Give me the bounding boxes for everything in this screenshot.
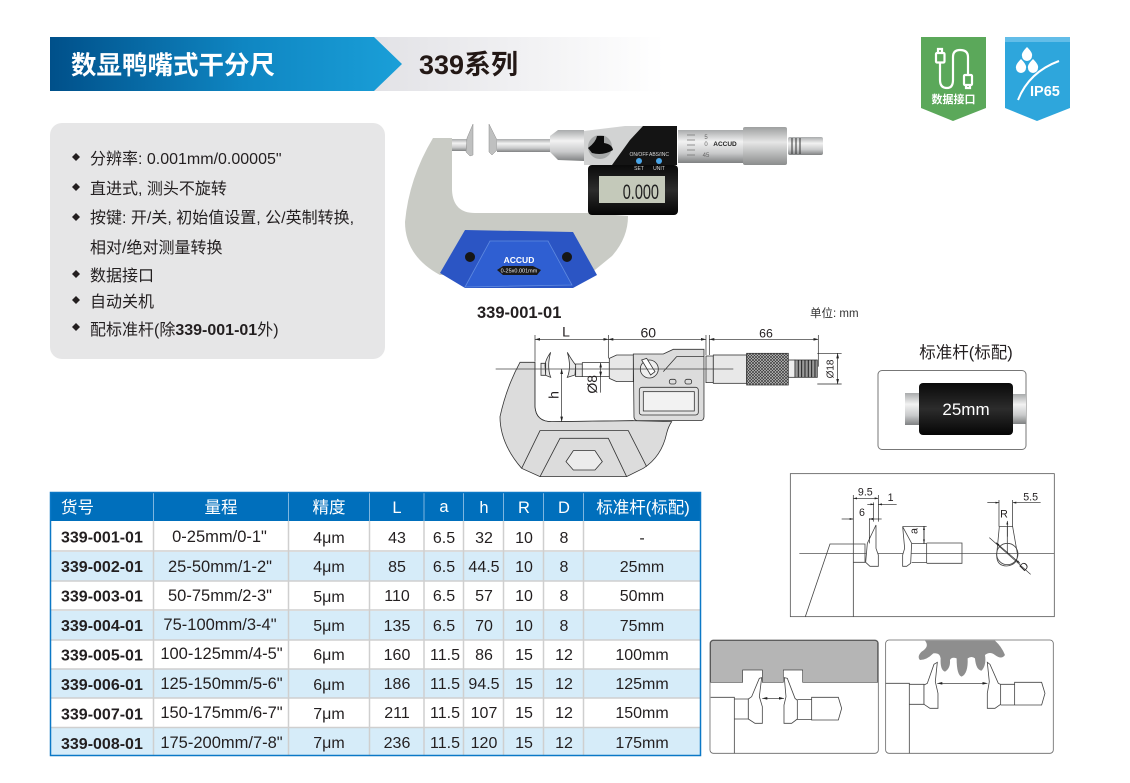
table row 1: - [639,530,645,547]
table row 4: 10 [515,618,533,635]
icon: usb cable [936,49,972,88]
feature list text: 数据接口 [90,267,154,285]
anvil and spindle [452,139,468,151]
table row 6: 94.5 [468,676,500,693]
product photo: micrometer: SET [634,166,644,172]
table row 5: 339-005-01 [61,648,143,664]
anvils [541,352,551,377]
thimble [678,130,744,163]
table row 5 [61,645,669,664]
grey workpiece [711,641,878,682]
title text: 数显鸭嘴式干分尺 [71,52,275,80]
table row 6: 125-150mm/5-6" [160,675,283,693]
micrometer outline [886,683,924,753]
table row 6: 125mm [615,676,669,693]
table row 7: 12 [555,705,573,722]
ball end view [997,527,1017,566]
table row 4: 339-004-01 [61,618,143,635]
detail labels [858,486,1038,574]
product photo: micrometer: ACCUD [504,255,534,265]
rod heading: 标准杆(标配) [919,343,1013,362]
table row 4: 70 [475,618,493,635]
photo frame [405,138,628,275]
table header: 精度 [312,498,346,517]
table row 2: 44.5 [468,559,500,576]
table row 7: 150mm [615,705,669,722]
dimension drawing [496,324,842,477]
detail labels: 1 [888,492,894,504]
blue insulator [440,230,597,288]
dimension labels: Ø18 [825,359,836,378]
table row 4: 6.5 [433,618,455,635]
table row 2: 10 [515,559,533,576]
unit label: 单位: mm [810,306,859,320]
detail diagram: jaw dimensions [790,474,1054,617]
product photo: micrometer: 0-25x0.001mm [501,268,538,274]
table row 1: 8 [560,530,569,547]
IP65 label: IP65 [1030,84,1060,100]
table row 1: 339-001-01 [61,530,143,546]
gear [919,641,1005,677]
dimension labels: h [546,391,562,399]
digital head [584,126,643,165]
table row 5: 11.5 [430,647,460,664]
table row 6: 12 [555,676,573,693]
dimension labels: 60 [641,324,656,340]
head body [633,349,704,421]
product photo: micrometer: ON/OFF [630,152,648,158]
table header: D [558,499,570,517]
product photo: micrometer: UNIT [653,166,665,172]
micrometer outline left [711,697,748,753]
product photo: micrometer: 0 [704,142,708,148]
product photo: micrometer [405,124,823,322]
left jaw [866,525,878,566]
gap arrow [937,682,987,684]
table row 8: 11.5 [430,735,460,752]
dimension labels: L [562,324,570,340]
dimension lines [535,335,842,422]
table row 7: 107 [471,705,497,722]
table row 6: 11.5 [430,676,460,693]
banner blue arrow [50,37,402,91]
table rows [50,492,701,756]
table row 1: 10 [515,530,533,547]
table row 7: 7μm [313,706,345,723]
table header: L [392,499,402,517]
rod label: 25mm [942,400,990,419]
feature list text: 配标准杆(除339-001-01外) [90,321,279,339]
table row 6 [61,675,669,694]
table row 1: 0-25mm/0-1" [172,528,267,546]
detail diagram: gear measurement [886,640,1053,753]
product photo: micrometer: ABS/INC [649,152,669,158]
detail diagram: slot measurement [710,640,878,753]
feature list text: 直进式, 测头不旋转 [90,180,227,198]
table row 5: 6μm [313,647,345,664]
thimble [706,356,713,383]
table row 8: 120 [471,735,497,752]
white throat [535,362,633,421]
detail labels: D [1018,560,1032,574]
dimension labels: Ø8 [584,375,600,394]
table row 4 [61,616,664,635]
table row 3: 8 [560,588,569,605]
table row 7: 11.5 [430,705,460,722]
table row 7: 150-175mm/6-7" [160,704,283,722]
table header: 标准杆(标配) [596,498,690,517]
table row 2: 25-50mm/1-2" [168,558,272,576]
table row 6: 6μm [313,677,345,694]
table row 4: 75-100mm/3-4" [163,616,277,634]
feature list text: 按键: 开/关, 初始值设置, 公/英制转换, [90,209,354,227]
bullet diamonds [72,153,80,331]
rod box [878,370,1026,450]
table row 4: 75mm [620,618,664,635]
banner grey series section [374,37,664,91]
table row 3 [61,587,664,606]
table row 2: 339-002-01 [61,559,143,576]
table row 5: 15 [515,647,533,664]
table row 1: 32 [475,530,493,547]
detail labels: 6 [859,507,865,519]
table row 8: 175-200mm/7-8" [160,734,283,752]
feature list text: 相对/绝对测量转换 [90,239,222,257]
table row 7: 15 [515,705,533,722]
table row 3: 339-003-01 [61,588,143,606]
table row 3: 10 [515,588,533,605]
table header [61,498,690,517]
table row 5: 100mm [615,647,669,664]
badge label: 数据接口 [932,92,976,106]
table header: a [439,498,449,516]
table row 5: 100-125mm/4-5" [160,645,283,663]
spec table [50,492,701,756]
table row 8: 12 [555,735,573,752]
table row 1: 43 [388,530,406,547]
table row 3: 57 [475,588,493,605]
table header: R [518,499,530,517]
table row 6: 186 [384,676,410,693]
detail labels: R [1000,508,1008,520]
badge: data port [921,37,986,121]
table row 2: 4μm [313,559,345,576]
table row 4: 5μm [313,618,345,635]
center line [799,552,1054,554]
table row 2 [61,558,664,576]
drawing frame [500,362,672,477]
table row 8: 175mm [615,735,669,752]
dimension labels: 66 [759,326,773,340]
table row 4: 135 [384,618,410,635]
table row 4: 8 [560,618,569,635]
feature list text [90,150,354,339]
model label: 339-001-01 [477,304,561,322]
table header: h [479,499,489,517]
product photo: micrometer: 45 [703,153,710,159]
table header: 货号 [61,498,94,517]
table row 8 [61,734,669,753]
feature list text: 分辨率: 0.001mm/0.00005" [90,150,282,168]
table row 1: 6.5 [433,530,455,547]
product photo: micrometer: 5 [704,135,708,141]
micrometer outline right [784,678,797,723]
series text: 339系列 [419,50,518,80]
badge: IP65 [1005,37,1070,121]
rod ends [905,393,920,425]
product photo: micrometer: ACCUD [713,141,737,148]
dimension labels [546,324,836,399]
table row 8: 236 [384,735,410,752]
rod body [919,383,1013,435]
table row 1 [61,528,645,547]
center line [496,368,733,370]
table row 2: 6.5 [433,559,455,576]
table row 3: 50-75mm/2-3" [168,587,272,605]
detail labels: 5.5 [1023,491,1038,503]
table row 3: 110 [384,588,410,605]
icon: arc [1018,61,1059,100]
right jaw and spindle [903,527,912,566]
detail labels: 9.5 [858,486,873,498]
table header: 量程 [204,498,238,517]
table row 5: 160 [384,647,410,664]
table row 8: 339-008-01 [61,736,143,753]
panel: features [50,123,385,359]
product photo: micrometer: 0.000 [623,180,659,204]
table row 3: 6.5 [433,588,455,605]
gap arrow [762,697,784,699]
table row 6: 339-006-01 [61,677,143,694]
dimension lines [842,495,1041,563]
table row 5: 86 [475,647,493,664]
table row 2: 25mm [620,559,664,576]
table row 7 [61,704,669,724]
table row 3: 50mm [620,588,664,605]
table row 5: 12 [555,647,573,664]
detail labels: a [909,528,921,534]
table row 8: 15 [515,735,533,752]
table row 6: 15 [515,676,533,693]
table row 7: 211 [384,705,410,722]
table row 1: 4μm [313,530,345,547]
title banner [50,37,664,91]
table row 3: 5μm [313,589,345,606]
table row 7: 339-007-01 [61,706,143,724]
table row 2: 8 [560,559,569,576]
table row 2: 85 [388,559,406,576]
frame outline [805,495,865,617]
icon: water drops [1016,47,1038,73]
table row 8: 7μm [313,735,345,752]
standard rod [878,343,1026,450]
feature list text: 自动关机 [90,293,154,311]
